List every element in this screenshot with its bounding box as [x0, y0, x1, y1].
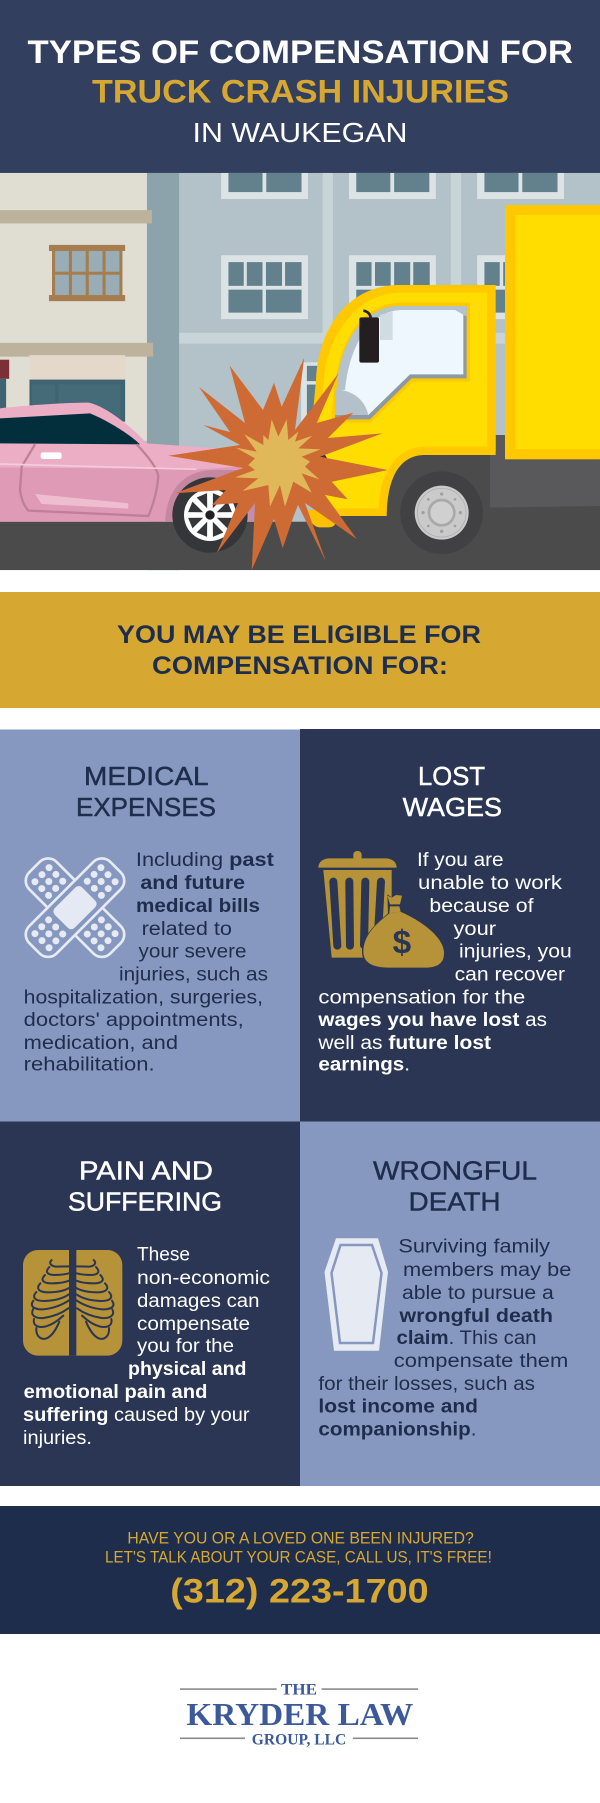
body text: lost wages: can recover — [455, 964, 566, 985]
body text: medical expenses: and future — [140, 873, 245, 894]
heading: lost wages: WAGES — [403, 792, 502, 822]
icon: rib cage — [23, 1250, 122, 1356]
cargo box — [505, 205, 600, 459]
title line 2: TRUCK CRASH INJURIES — [92, 74, 509, 110]
body text: medical expenses: injuries, such as — [119, 964, 268, 985]
truck — [307, 205, 600, 554]
body text: lost wages: well as future lost — [317, 1033, 492, 1054]
banner line 1: YOU MAY BE ELIGIBLE FOR — [117, 621, 481, 649]
body text: medical expenses: rehabilitation. — [24, 1055, 155, 1076]
truck cab — [307, 285, 496, 516]
heading: pain and suffering: PAIN AND — [79, 1156, 213, 1186]
heading: pain and suffering — [68, 1156, 222, 1216]
logo: The Kryder Law Group, LLC: GROUP, LLC — [252, 1731, 346, 1748]
banner line 2: COMPENSATION FOR: — [152, 652, 448, 680]
crash scene illustration — [0, 173, 600, 570]
body text: pain and suffering: emotional pain and — [24, 1382, 207, 1403]
body text: wrongful death: for their losses, such as — [318, 1374, 535, 1395]
body text: wrongful death: companionship . — [318, 1420, 476, 1441]
body text: lost wages: because of — [429, 896, 534, 917]
heading: wrongful death: WRONGFUL — [373, 1156, 537, 1186]
pink car — [0, 403, 257, 553]
gold eligibility banner — [0, 592, 600, 708]
body text: lost wages: your — [454, 919, 497, 940]
body text: lost wages: If you are — [417, 850, 504, 871]
call to action banner — [0, 1506, 600, 1634]
body text: medical expenses: hospitalization, surgeries, — [24, 987, 263, 1008]
icon: crossed bandages — [21, 853, 129, 962]
heading: pain and suffering: SUFFERING — [68, 1186, 222, 1216]
cab window — [332, 303, 470, 423]
body text: wrongful death: Surviving family — [398, 1237, 551, 1258]
heading: wrongful death: DEATH — [409, 1186, 501, 1216]
body text: pain and suffering: damages can — [137, 1291, 260, 1312]
heading: wrongful death — [373, 1156, 537, 1216]
truck wheel — [400, 471, 483, 554]
body text: pain and suffering — [23, 1245, 270, 1449]
road — [0, 522, 600, 570]
body text: wrongful death: lost income and — [318, 1397, 478, 1418]
body text: medical expenses — [24, 850, 275, 1076]
car wheel — [165, 470, 248, 553]
body text: lost wages: injuries, you — [459, 941, 572, 962]
phone number: (312) 223-1700 — [170, 1573, 429, 1611]
logo: The Kryder Law Group, LLC: THE — [281, 1682, 317, 1699]
body text: wrongful death — [318, 1237, 571, 1441]
body text: pain and suffering: These — [137, 1245, 190, 1266]
body text: medical expenses: related to — [142, 919, 232, 940]
panel: medical expenses — [0, 730, 300, 1122]
panel: lost wages — [300, 729, 600, 1122]
panel: wrongful death — [300, 1122, 600, 1486]
heading: medical expenses: EXPENSES — [76, 792, 216, 822]
door outline — [20, 444, 158, 516]
title line 1: TYPES OF COMPENSATION FOR — [28, 34, 573, 70]
heading: lost wages: LOST — [418, 761, 485, 791]
heading: lost wages — [403, 761, 502, 822]
title line 3: IN WAUKEGAN — [192, 117, 408, 148]
call to action text — [105, 1528, 492, 1566]
body text: medical expenses: medication, and — [24, 1033, 178, 1054]
body text: wrongful death: compensate them — [394, 1351, 568, 1372]
explosion — [168, 358, 388, 570]
body text: lost wages: unable to work — [418, 873, 563, 894]
call to action text: LET'S TALK ABOUT YOUR CASE, CALL US, IT'S FREE! — [105, 1548, 492, 1566]
body text: medical expenses: your severe — [138, 941, 246, 962]
body text: pain and suffering: injuries. — [23, 1428, 92, 1449]
body text: lost wages: earnings . — [318, 1055, 410, 1076]
body text: wrongful death: wrongful death — [398, 1306, 553, 1327]
mirror — [359, 311, 379, 363]
header banner — [0, 0, 600, 173]
logo: The Kryder Law Group, LLC: KRYDER LAW — [186, 1696, 413, 1732]
heading: medical expenses: MEDICAL — [84, 761, 209, 791]
body text: pain and suffering: non-economic — [137, 1268, 270, 1289]
body text: wrongful death: able to pursue a — [402, 1283, 554, 1304]
body text: medical expenses: Including past — [136, 850, 275, 871]
body text: pain and suffering: you for the — [137, 1336, 234, 1357]
icon: trash can and money bag: $ — [393, 924, 412, 961]
body text: medical expenses: doctors' appointments, — [24, 1010, 244, 1031]
icon: coffin — [324, 1238, 388, 1351]
body text: lost wages: compensation for the — [318, 987, 525, 1008]
body text: medical expenses: medical bills — [136, 896, 260, 917]
logo: The Kryder Law Group, LLC — [180, 1682, 418, 1748]
body text: wrongful death: members may be — [403, 1260, 571, 1281]
door handle — [41, 452, 62, 459]
body text: lost wages: wages you have lost as — [317, 1010, 547, 1031]
bumper — [307, 510, 335, 527]
body text: wrongful death: claim. This can — [396, 1328, 536, 1349]
call to action text: HAVE YOU OR A LOVED ONE BEEN INJURED? — [127, 1528, 474, 1548]
body text: pain and suffering: compensate — [137, 1314, 250, 1335]
body text: pain and suffering: physical and — [128, 1359, 246, 1380]
body text: pain and suffering: suffering caused by your — [23, 1405, 250, 1426]
truck chassis — [383, 435, 600, 523]
heading: medical expenses — [76, 761, 216, 822]
panel: pain and suffering — [0, 1122, 300, 1486]
body text: lost wages — [317, 850, 572, 1076]
car window — [0, 413, 140, 444]
background buildings — [0, 173, 600, 570]
icon: trash can and money bag — [318, 851, 445, 969]
